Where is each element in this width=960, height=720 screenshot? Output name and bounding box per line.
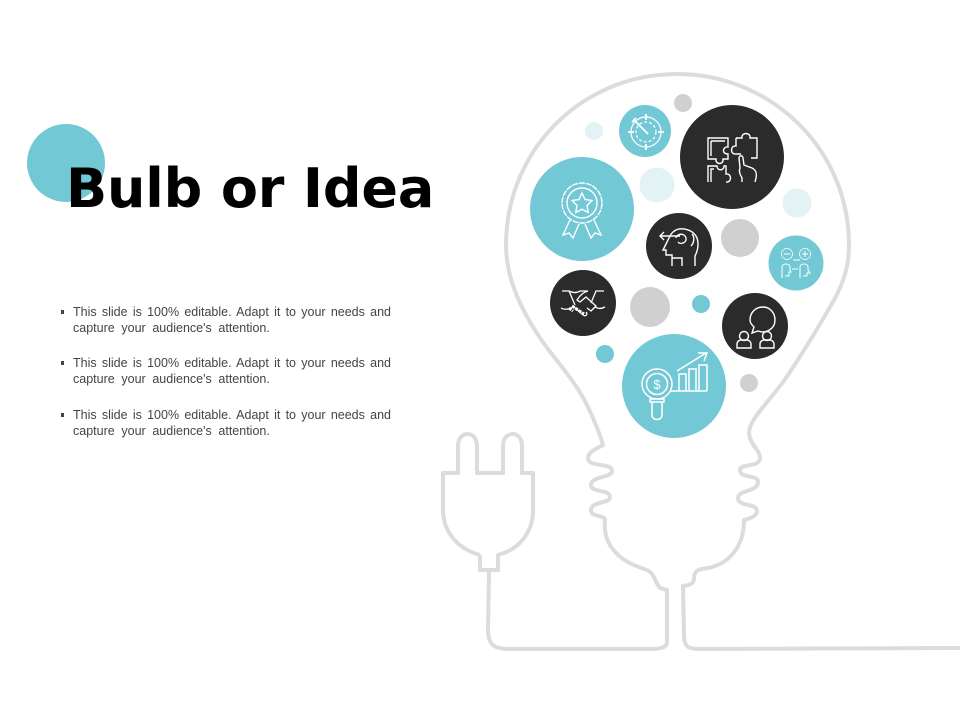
- icon: puzzle and hand: [680, 105, 784, 209]
- icon: target: [619, 105, 671, 157]
- text block: bullet 3: This slide is 100% editable. Adapt it to your needs and: [73, 408, 391, 422]
- icon: handshake: [550, 270, 616, 336]
- text block: bullet 3: capture your audience's attention.: [73, 424, 270, 438]
- text block: bullet 1: This slide is 100% editable. Adapt it to your needs and: [73, 305, 391, 319]
- icon: magnifier and growth chart: [622, 334, 726, 438]
- plug: [443, 434, 533, 570]
- icon: head: [646, 213, 712, 279]
- text block: bullet 1: capture your audience's attention.: [73, 321, 270, 335]
- icon: magnifier and growth chart: $: [653, 377, 661, 392]
- title: Bulb or Idea: [66, 157, 434, 220]
- text block: bullet 2: [61, 356, 391, 386]
- text block: bullet 3: [61, 408, 391, 438]
- decorative teal circle behind title: [27, 124, 105, 202]
- small dots: [585, 94, 812, 392]
- icon: medal: [530, 157, 634, 261]
- bulb outline with cord: [488, 74, 960, 649]
- text block: bullet 2: capture your audience's attention.: [73, 372, 270, 386]
- icon: conversation: [722, 293, 788, 359]
- icon: mindset exchange: [768, 236, 824, 290]
- text block: bullet 2: This slide is 100% editable. Adapt it to your needs and: [73, 356, 391, 370]
- text block: bullet 1: [61, 305, 391, 335]
